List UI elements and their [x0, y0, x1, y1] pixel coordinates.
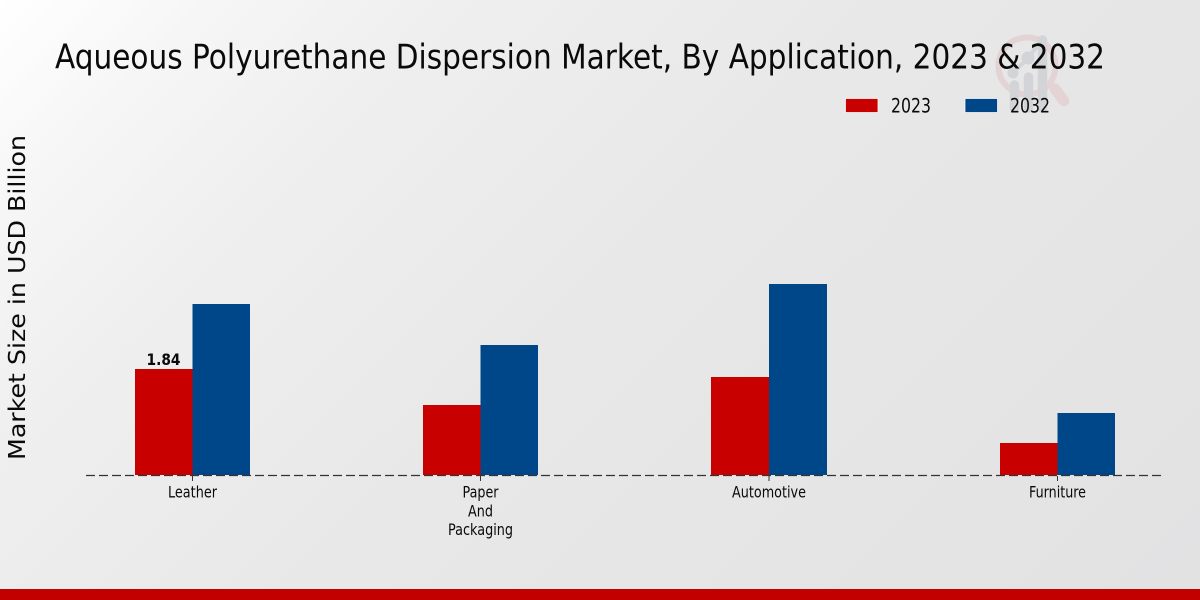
legend item: 2023: 2023 — [891, 94, 931, 118]
x-axis label: Leather: Leather — [168, 482, 217, 502]
watermark logo — [998, 38, 1064, 108]
legend item: 2023 — [846, 94, 931, 118]
x-axis label: Automotive: Automotive — [732, 482, 806, 502]
legend item: 2032: 2032 — [1010, 94, 1050, 118]
x-axis label: Paper And Packaging: And — [468, 502, 493, 520]
footer bar — [0, 589, 1200, 600]
bars: Furniture — [1000, 413, 1115, 475]
bar chart — [86, 284, 1164, 539]
y-axis label: Market Size in USD Billion — [3, 135, 31, 460]
bars: Paper And Packaging — [423, 345, 538, 475]
bars: Leather — [135, 304, 250, 475]
legend item: 2032 — [965, 94, 1050, 118]
x-axis label: Paper And Packaging: Paper — [462, 482, 499, 502]
value label: 1.84: 1.84 — [146, 350, 180, 369]
x-axis label: Paper And Packaging: Packaging — [448, 520, 513, 539]
legend — [846, 94, 1050, 118]
x-axis label: Furniture: Furniture — [1029, 482, 1086, 502]
bars: Automotive — [711, 284, 827, 475]
x-axis label: Paper And Packaging — [448, 482, 513, 539]
